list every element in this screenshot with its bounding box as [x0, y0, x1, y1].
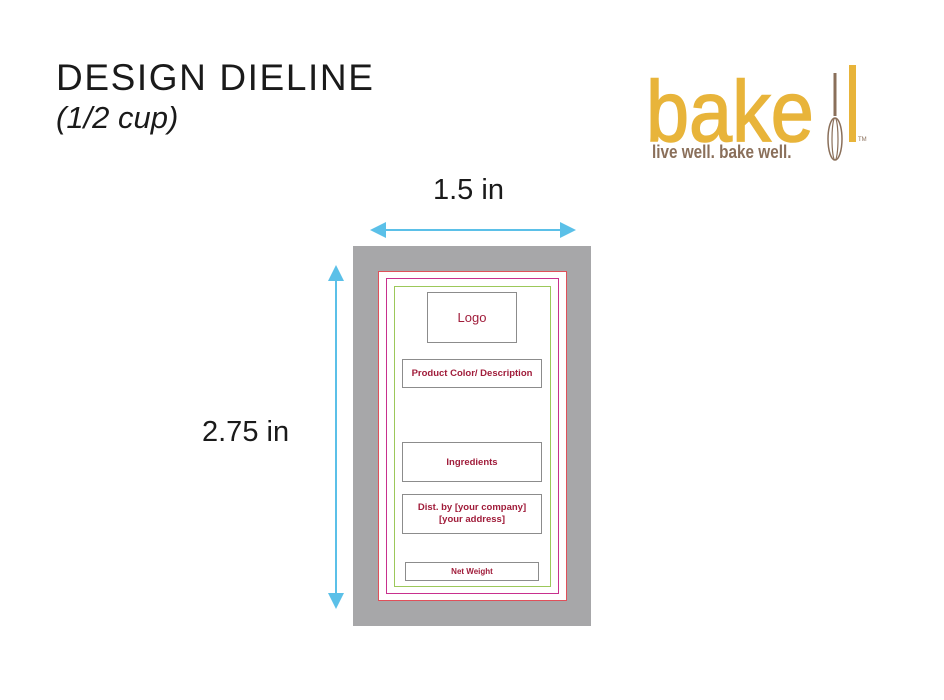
logo: bakell: TM: [858, 137, 867, 143]
box: product: [402, 359, 542, 388]
icon: whisk: [827, 73, 843, 161]
box: logo: [427, 292, 517, 343]
box: distributor: Dist. by [your company]: [418, 502, 526, 513]
arrow: vertical: [328, 265, 344, 609]
box: distributor: [402, 494, 542, 534]
box: distributor: [your address]: [439, 514, 505, 525]
width label: 1.5 in: [433, 174, 504, 206]
subtitle: (1/2 cup): [56, 100, 178, 135]
arrow: horizontal: [370, 222, 576, 238]
height label: 2.75 in: [202, 416, 289, 448]
box: logo: Logo: [458, 310, 486, 325]
box: net weight: Net Weight: [451, 567, 493, 576]
dieline panel: [353, 246, 591, 626]
logo: bakell: bake: [646, 64, 814, 160]
box: ingredients: [402, 442, 542, 482]
box: net weight: [405, 562, 539, 581]
box: ingredients: Ingredients: [446, 456, 498, 468]
logo: bakell: live well. bake well.: [652, 142, 791, 162]
title: DESIGN DIELINE: [56, 57, 374, 98]
box: product: Product Color/ Description: [412, 368, 532, 379]
